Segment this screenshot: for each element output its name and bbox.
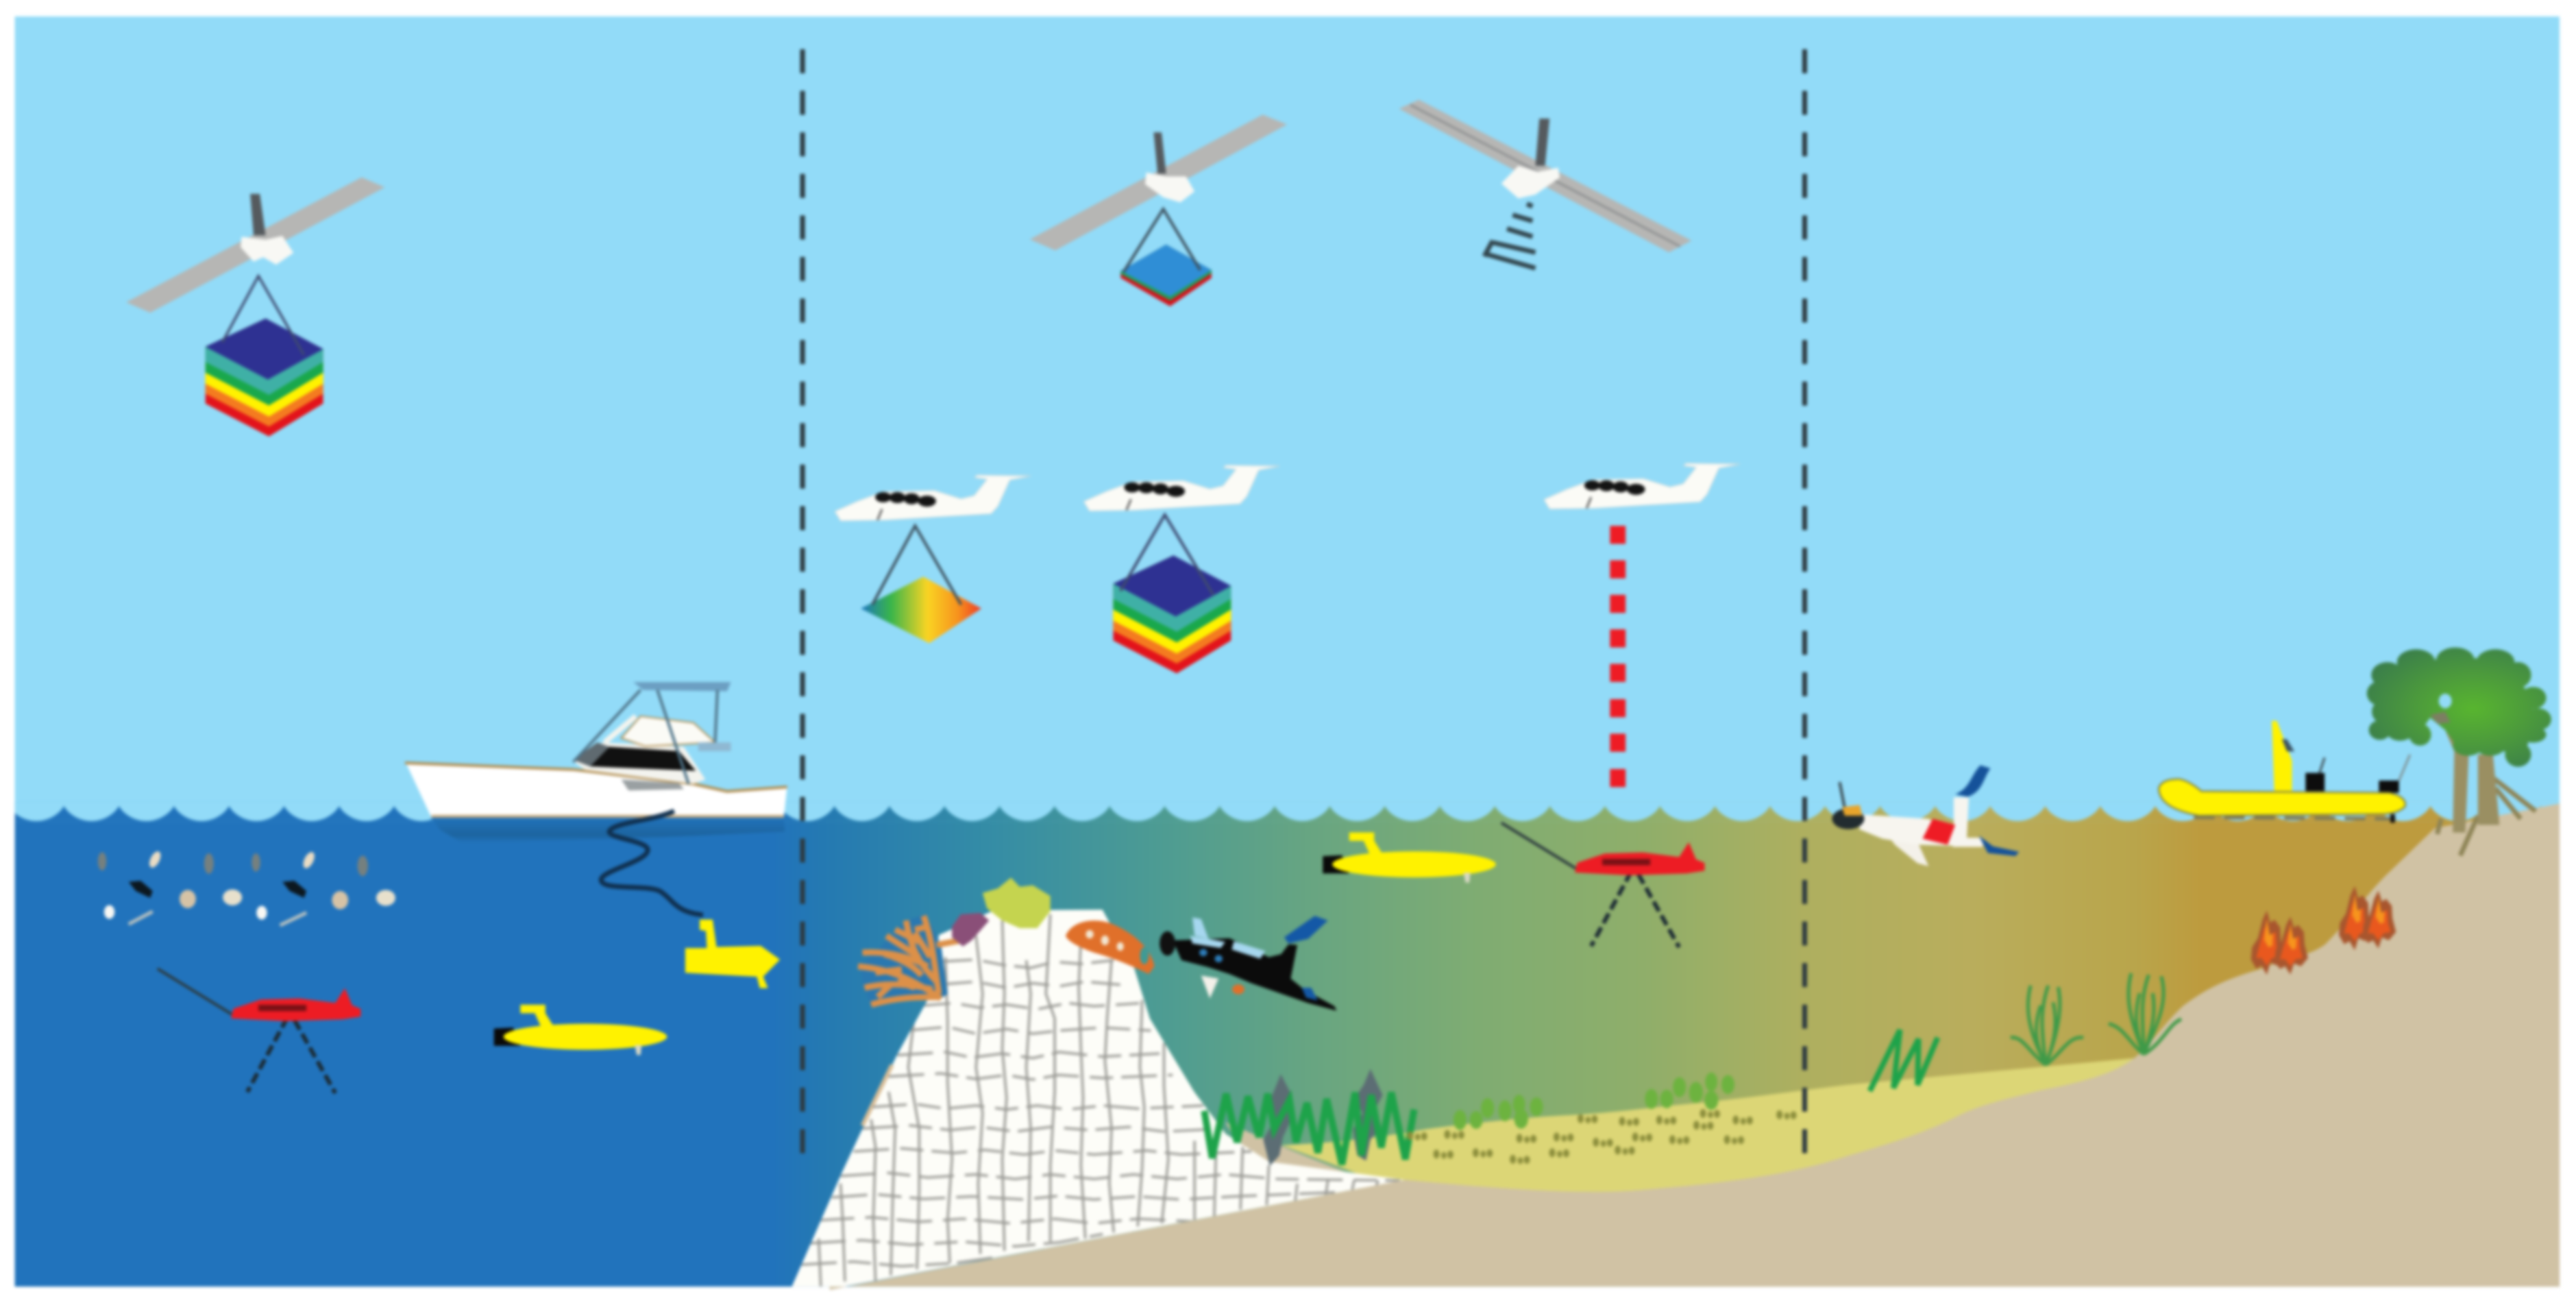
yellow glider, offshore bbox=[494, 1005, 667, 1055]
sea surface waves bbox=[15, 802, 2560, 822]
satellite with multispectral layers bbox=[1030, 114, 1287, 306]
tan sediment at reef base bbox=[1225, 1122, 1413, 1191]
dashed zone divider: offshore bbox=[800, 49, 805, 1157]
nearshore seagrass bbox=[1869, 973, 2181, 1091]
sand pebbles and shrubs bbox=[1407, 1073, 1797, 1164]
satellite with altimeter signal bbox=[1399, 99, 1691, 268]
icon: orange brain coral bbox=[1066, 920, 1154, 974]
reef corals bbox=[858, 877, 1154, 1006]
yellow glider, mid-shelf bbox=[1323, 832, 1496, 883]
aircraft with spectral diamond bbox=[835, 475, 1031, 643]
seabed and shoreline bbox=[830, 803, 2560, 1290]
hull shadow in water bbox=[430, 816, 785, 843]
orange corals on slope bbox=[2251, 886, 2396, 975]
water body with depth gradient bbox=[15, 802, 2560, 1286]
scuba diver bbox=[1160, 916, 1336, 1011]
red towed AUV, offshore bbox=[158, 968, 360, 1093]
dashed zone divider: nearshore bbox=[1802, 49, 1807, 1157]
aircraft with hyperspectral cube bbox=[1084, 465, 1280, 673]
yellow inflatable survey boat bbox=[2159, 721, 2410, 822]
icon: yellow-green coral bbox=[983, 877, 1051, 928]
red towed AUV, mid-shelf bbox=[1501, 822, 1704, 947]
tethered ROV and cable bbox=[601, 811, 780, 988]
sand flat bbox=[1281, 1058, 2134, 1208]
survey vessel bbox=[405, 682, 787, 818]
mangrove tree bbox=[2367, 648, 2551, 855]
coral reef mound bbox=[792, 910, 1405, 1288]
icon: purple sponge bbox=[952, 913, 989, 947]
icon: branching orange fan coral bbox=[858, 914, 961, 1006]
satellite with hyperspectral cube (offshore) bbox=[126, 178, 385, 437]
plankton and particles bbox=[98, 851, 395, 925]
aircraft with lidar pulse bbox=[1544, 463, 1740, 787]
snorkeler bbox=[1832, 765, 2019, 866]
seagrass and dark algae bbox=[1204, 1069, 1414, 1166]
